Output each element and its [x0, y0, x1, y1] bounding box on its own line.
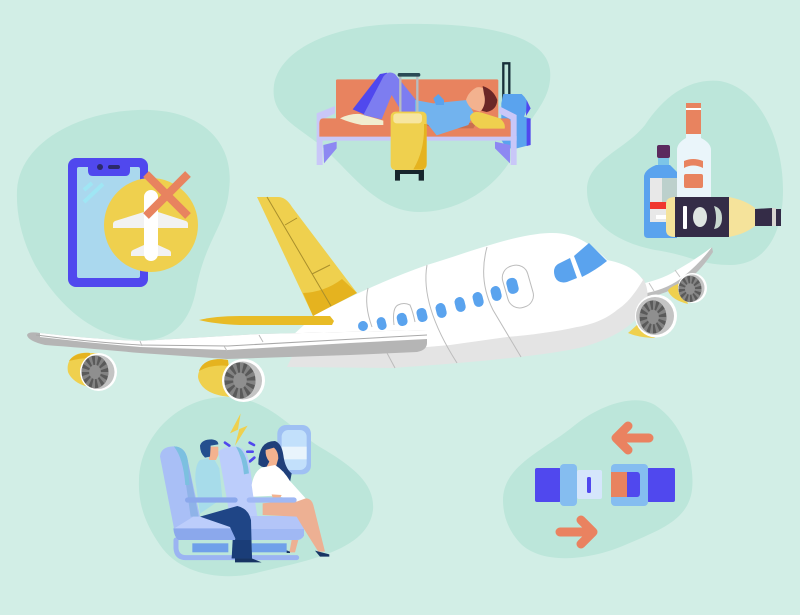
seat supports — [192, 543, 287, 552]
middle seat back — [218, 447, 257, 517]
far leg — [353, 73, 387, 114]
suitcase handle — [398, 73, 420, 112]
woman — [252, 441, 329, 557]
blob: phone background — [17, 110, 230, 340]
left engine — [68, 353, 117, 391]
left holder — [560, 464, 577, 506]
phone screen — [77, 167, 140, 278]
cross mark — [146, 174, 188, 216]
white bottle — [677, 103, 711, 198]
inner engine — [198, 359, 265, 402]
fuselage upper — [293, 233, 643, 352]
tension marks — [225, 443, 254, 461]
lightning bolt — [230, 413, 248, 446]
nose engine — [628, 294, 677, 338]
belt tongue — [577, 470, 602, 499]
middle seat headrest — [236, 447, 249, 474]
illustration: passengers in airplane seats — [160, 413, 329, 562]
bench seat — [319, 118, 511, 137]
hand — [433, 94, 444, 105]
cushion shadow — [426, 123, 477, 128]
left strap — [535, 468, 561, 502]
lying bottle — [666, 197, 781, 237]
backpack — [501, 94, 531, 148]
plane symbol — [113, 190, 188, 261]
yellow circle — [104, 178, 198, 272]
near leg — [363, 72, 416, 119]
airplane — [27, 197, 713, 402]
far engine — [668, 273, 707, 304]
middle seat cushion — [247, 516, 304, 540]
blob: passengers background — [139, 397, 373, 576]
shoes — [340, 114, 383, 125]
illustration: person sleeping on airport bench — [317, 63, 531, 181]
buckle — [611, 464, 648, 506]
hair — [481, 86, 497, 112]
blob: bench background — [274, 24, 550, 212]
fuselage lower — [287, 278, 648, 368]
horizontal stabilizer — [199, 316, 334, 325]
fuselage seams — [367, 247, 521, 368]
passenger windows — [357, 277, 520, 332]
head — [466, 87, 486, 112]
pillow — [470, 112, 505, 129]
front seat back — [160, 446, 200, 528]
phone camera — [97, 164, 120, 170]
icon: phone with cancelled flight — [68, 158, 198, 287]
main wing — [27, 330, 427, 359]
icon: seat belt with arrows — [535, 426, 675, 544]
tail fin — [257, 197, 357, 316]
illustration: alcohol bottles — [644, 103, 781, 238]
door outlines — [394, 262, 536, 325]
man — [195, 439, 262, 562]
blue bottle — [644, 145, 677, 238]
front seat headrest — [174, 446, 199, 517]
blob: bottles background — [587, 81, 783, 265]
phone body — [68, 158, 148, 287]
front seat cushion — [173, 517, 246, 540]
cockpit windows — [554, 243, 607, 282]
arrow: left — [616, 426, 649, 450]
backpack handle — [503, 63, 509, 112]
front armrest — [185, 497, 238, 503]
base frame — [176, 540, 297, 558]
bench frame — [317, 106, 517, 165]
phone notch — [88, 166, 130, 176]
right strap — [647, 468, 675, 502]
far wing — [645, 247, 713, 298]
middle armrest — [247, 497, 297, 503]
suitcase wheels — [395, 169, 424, 181]
blob: seat belt background — [503, 400, 693, 558]
screen glare — [84, 183, 103, 202]
torso — [415, 100, 474, 135]
suitcase — [391, 112, 427, 170]
arrow: right — [560, 520, 593, 544]
bench back — [336, 79, 498, 126]
window — [277, 425, 311, 474]
